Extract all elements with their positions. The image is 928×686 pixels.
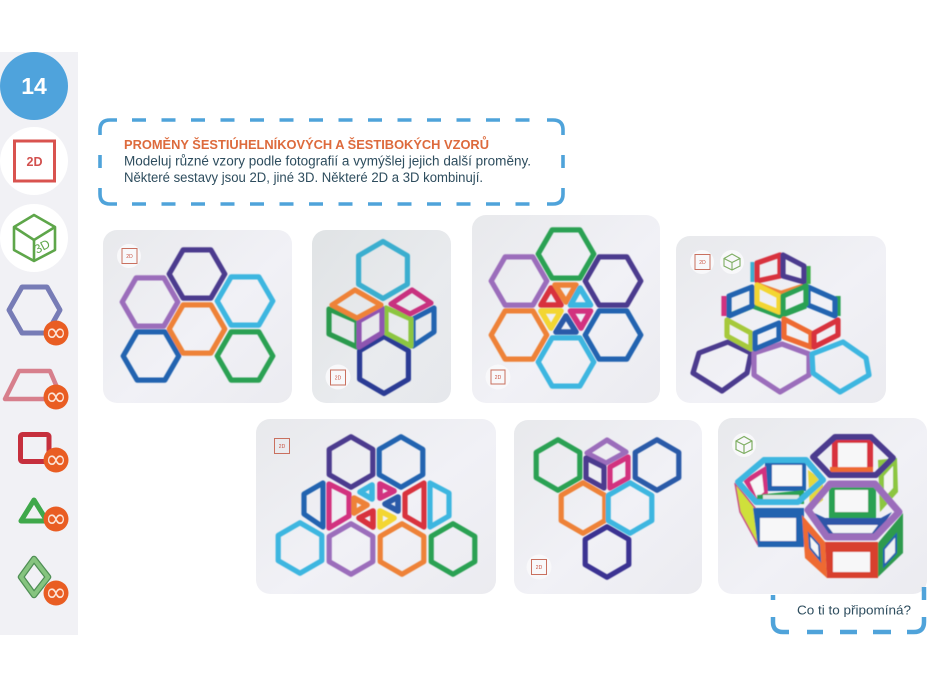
icon: 2D tag: 2D: [335, 376, 342, 382]
icon: rhombus piece, unlimited: ∞: [45, 578, 67, 608]
panel: photo 5, hexagons with trapezoids and triangles: [256, 419, 496, 594]
instruction text: Modeluj různé vzory podle fotografií a vymýšlej jejich další proměny.: [124, 154, 531, 168]
callout: question: [773, 587, 924, 632]
icon: 2D tag: [526, 554, 552, 580]
icon: trapezoid piece, unlimited: ∞: [45, 382, 67, 412]
icon: 2D tag: [326, 364, 350, 390]
icon: triangle piece, unlimited: ∞: [45, 504, 67, 534]
icon: 2D tag: 2D: [126, 254, 133, 260]
icon: rhombus piece, unlimited: [21, 559, 68, 608]
icon: triangle piece, unlimited: [21, 500, 68, 534]
icon: 3D tag: [732, 433, 756, 457]
panel: photo 6, hexagons with cube corner: [514, 420, 702, 594]
icon: 3D cube: [0, 204, 68, 272]
icon: 2D tag: 2D: [536, 565, 543, 571]
panel: photo 4, hexagon base with 3D walls: [676, 236, 886, 403]
instruction text: Některé sestavy jsou 2D, jiné 3D. Některé 2D a 3D kombinují.: [124, 170, 483, 185]
dashed instruction box: [100, 120, 563, 204]
icon: 2D tag: 2D: [495, 375, 502, 381]
back prism: [813, 437, 898, 512]
icon: 2D tag: [274, 438, 290, 454]
icon: 2D tag: [117, 244, 141, 268]
panel: photo 1, six hexagons: [103, 230, 292, 403]
icon: hexagon piece, unlimited: [9, 287, 68, 348]
sidebar: [0, 52, 78, 635]
icon: square piece, unlimited: [20, 434, 68, 475]
icon: 3D cube: 3D: [32, 237, 53, 257]
callout: question: Co ti to připomíná?: [797, 604, 911, 618]
icon: 2D tag: [486, 364, 510, 390]
panel: photo 2, hexagons with rhombi: [312, 230, 451, 403]
panel: photo 7, three 3D hexagonal prisms: [718, 418, 927, 594]
icon: 2D tag: [690, 250, 714, 274]
icon: square piece, unlimited: ∞: [45, 445, 67, 475]
icon: hexagon piece, unlimited: ∞: [45, 318, 67, 348]
front prism: [802, 484, 903, 578]
heading: PROMĚNY ŠESTIÚHELNÍKOVÝCH A ŠESTIBOKÝCH VZORŮ: [124, 136, 489, 152]
icon: 3D tag: [720, 250, 744, 274]
panel: photo 3, hexagons around triangles: [472, 215, 660, 403]
icon: 2D tag: 2D: [699, 260, 706, 266]
icon: 2D square: [0, 127, 68, 195]
left prism: [735, 460, 823, 547]
lesson number badge: 14: [21, 73, 47, 99]
lesson number badge: [0, 52, 68, 120]
icon: 2D tag: 2D: [279, 444, 286, 450]
icon: trapezoid piece, unlimited: [5, 371, 68, 412]
instruction text: [124, 154, 531, 185]
icon: 2D square: 2D: [27, 155, 42, 169]
